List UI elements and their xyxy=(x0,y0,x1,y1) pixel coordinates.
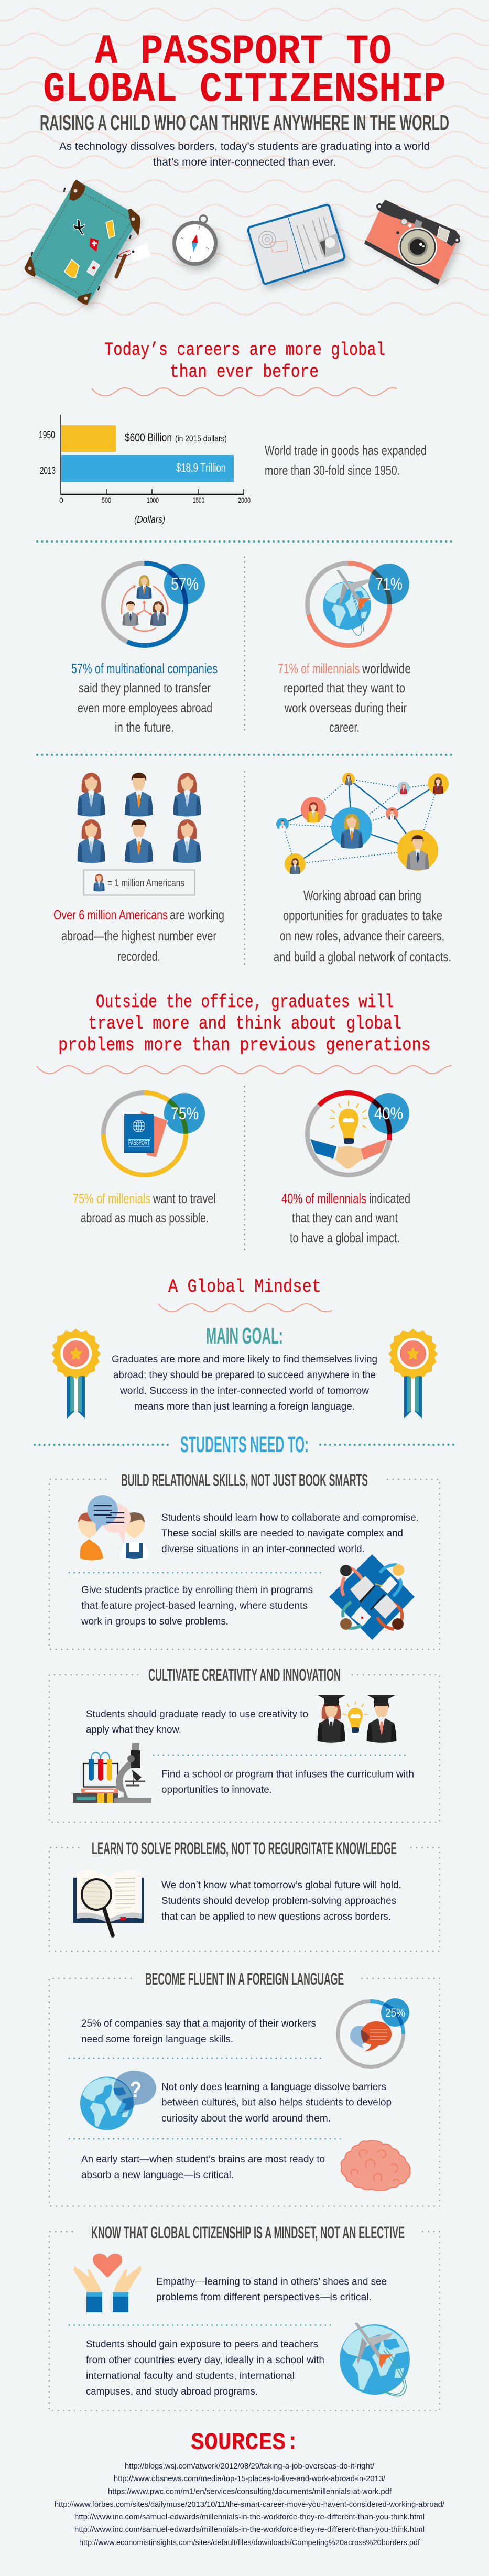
icon: globe with question bubble xyxy=(80,2071,156,2130)
text: 75%: 75% of millenials xyxy=(73,1190,150,1206)
panel: foreign language xyxy=(49,1969,440,2206)
text: source links: http://www.forbes.com/sites/dailymuse/2013/10/11/the-smart-career-move-you-havent-considered-working-abroad/ xyxy=(55,2501,445,2509)
text: 71%: reported that they want to xyxy=(284,680,405,696)
text: creativity xyxy=(86,1708,308,1735)
text: program xyxy=(161,1769,414,1795)
heading: careers: than ever before xyxy=(170,362,319,383)
text: 25% of companies xyxy=(81,2018,316,2045)
icon: passport: PASSPORT xyxy=(128,1139,150,1146)
heading: CULTIVATE CREATIVITY AND INNOVATION xyxy=(148,1665,341,1684)
heading: main goal: MAIN GOAL: xyxy=(206,1323,283,1349)
text: 75% xyxy=(73,1190,216,1226)
intro text: that’s more inter-connected than ever. xyxy=(153,156,336,168)
icon: transferring employees xyxy=(122,575,169,631)
text: problem solving: that can be applied to new questions across borders. xyxy=(161,1911,391,1922)
donut chart: 75% xyxy=(104,1092,205,1175)
text: 57%: even more employees abroad xyxy=(78,700,212,716)
donut chart: 75%: 75% xyxy=(171,1104,199,1123)
heading: outside the office: Outside the office, graduates will xyxy=(96,992,394,1013)
panel: 6 million Americans xyxy=(53,773,224,964)
network diagram xyxy=(276,773,449,874)
panel: 57% multinational companies xyxy=(71,563,218,735)
text: 71%: worldwide xyxy=(362,661,411,676)
text: 57% xyxy=(71,661,218,735)
heading: sources: SOURCES: xyxy=(191,2429,299,2456)
legend xyxy=(84,870,195,895)
text: source links: http://blogs.wsj.com/atwork/2012/08/29/taking-a-job-overseas-do-it-right/ xyxy=(125,2462,375,2471)
text: collaborate xyxy=(161,1512,419,1555)
donut chart: 40%: 40% xyxy=(374,1104,403,1123)
donut chart: 40% xyxy=(290,1076,409,1192)
heading: a global mindset: A Global Mindset xyxy=(168,1276,321,1297)
intro text xyxy=(59,140,430,168)
panel: global network xyxy=(274,773,451,965)
text: exposure: from other countries every day, ideally in a school with xyxy=(86,2354,324,2366)
bar chart: world trade: 500 xyxy=(102,496,111,504)
text: 25% of companies: need some foreign language skills. xyxy=(81,2033,233,2045)
text: problem solving: Students should develop problem-solving approaches xyxy=(161,1895,396,1907)
heading: outside the office xyxy=(58,992,431,1056)
panel: global citizenship mindset xyxy=(49,2223,440,2411)
text: working abroad xyxy=(274,887,451,965)
text: collaborate: Students should learn how to collaborate and compromise. xyxy=(161,1512,419,1523)
pictogram: six people xyxy=(78,773,201,863)
donut chart: 71%: 71% xyxy=(375,575,403,593)
text: 25% of companies: 25% of companies say that a majority of their workers xyxy=(81,2018,316,2029)
text: early start: absorb a new language—is critical. xyxy=(81,2169,234,2181)
icon: luggage handle xyxy=(116,256,125,277)
text: language barriers xyxy=(161,2081,392,2124)
text: source links: http://www.economistinsights.com/sites/default/files/downloads/Competing%20across%20borders.pdf xyxy=(79,2539,420,2547)
text: main goal: world. Success in the inter-connected world of tomorrow xyxy=(119,1385,370,1397)
text: source links: http://www.inc.com/samuel-edwards/millennials-in-the-workforce-they-re-different-than-you-think.html xyxy=(74,2526,425,2534)
text: early start: An early start—when student’s brains are most ready to xyxy=(81,2153,325,2165)
text: creativity: apply what they know. xyxy=(86,1724,181,1735)
text: problem solving xyxy=(161,1879,401,1922)
text: exposure xyxy=(86,2339,324,2397)
icon: luggage tag xyxy=(130,243,151,262)
text: world trade xyxy=(265,442,427,478)
icon: white sticker xyxy=(87,261,100,276)
text: collaborate: These social skills are needed to navigate complex and xyxy=(161,1528,403,1539)
bar chart: world trade: 0 xyxy=(59,496,63,504)
icon: hands with heart xyxy=(73,2254,142,2312)
text: 57%: said they planned to transfer xyxy=(79,680,211,696)
heading: careers xyxy=(104,340,385,383)
text: main goal: means more than just learning a foreign language. xyxy=(134,1401,355,1412)
main goal panel xyxy=(51,1323,438,1419)
bar chart: world trade: 1000 xyxy=(147,496,159,504)
text: source links: http://www.cbsnews.com/media/top-15-places-to-live-and-work-abroad-in-2013/ xyxy=(114,2475,386,2483)
text: source links xyxy=(55,2462,445,2547)
legend: = 1 million Americans xyxy=(107,878,184,889)
text: over 6 million: recorded. xyxy=(117,948,160,964)
text: empathy: problems from different perspectives—is critical. xyxy=(156,2291,372,2303)
bar chart: world trade: $18.9 Trillion xyxy=(176,461,226,474)
text: 40%: that they can and want xyxy=(292,1210,398,1226)
title: GLOBAL CITIZENSHIP xyxy=(43,66,446,114)
text: over 6 million xyxy=(53,907,224,964)
text: 57%: in the future. xyxy=(115,719,174,735)
bar chart: world trade: 1500 xyxy=(193,496,204,504)
panel: build relational skills xyxy=(49,1471,440,1649)
donut chart: 25%: 25% xyxy=(385,2006,405,2019)
icon: left medal xyxy=(51,1329,101,1419)
donut chart: 25% xyxy=(338,1998,409,2066)
text: language barriers: Not only does learning a language dissolve barriers xyxy=(161,2081,386,2093)
icon: camera xyxy=(364,200,460,285)
panel: cultivate creativity xyxy=(49,1665,440,1822)
icon: globe with plane xyxy=(340,2323,410,2396)
icon: open passport xyxy=(248,205,344,284)
text: exposure: international faculty and students, international xyxy=(86,2370,295,2382)
panel: 71% millennials xyxy=(278,563,411,735)
text: problem solving: We don’t know what tomorrow’s global future will hold. xyxy=(161,1879,401,1891)
text: 75%: want to travel xyxy=(153,1190,216,1206)
icon: microscope and test tubes xyxy=(73,1743,151,1803)
text: main goal: Graduates are more and more likely to find themselves living xyxy=(112,1354,377,1365)
text: 71%: 71% of millennials xyxy=(278,661,360,676)
text: collaborate: diverse situations in an inter-connected world. xyxy=(161,1543,365,1555)
text: exposure: campuses, and study abroad programs. xyxy=(86,2386,258,2397)
text: working abroad: Working abroad can bring xyxy=(303,887,421,903)
text: project based: work in groups to solve problems. xyxy=(81,1616,229,1627)
bar chart: world trade: 1950 xyxy=(39,430,55,441)
text: 40% xyxy=(281,1190,410,1246)
icon: right medal xyxy=(388,1329,438,1419)
icon: students around table xyxy=(329,1554,415,1640)
icon: passport xyxy=(124,1111,168,1157)
heading: students need to: STUDENTS NEED TO: xyxy=(180,1432,309,1457)
icon: suitcase xyxy=(25,180,151,305)
heading: outside the office: travel more and think about global xyxy=(88,1013,401,1034)
bar chart: world trade xyxy=(39,415,251,525)
text: early start xyxy=(81,2153,325,2181)
text: 75%: abroad as much as possible. xyxy=(81,1210,209,1226)
panel: 40% global impact xyxy=(281,1076,410,1246)
icon: yellow sticker xyxy=(64,259,79,278)
text: language barriers: between cultures, but also helps students to develop xyxy=(161,2097,392,2108)
heading: careers: Today’s careers are more global xyxy=(104,340,385,361)
heading: outside the office: problems more than previous generations xyxy=(58,1035,431,1056)
bar chart: world trade: $600 Billion xyxy=(125,431,172,444)
text: program: Find a school or program that infuses the curriculum with xyxy=(161,1769,414,1780)
text: project based: that feature project-based learning, where students xyxy=(81,1600,308,1611)
text: 57%: 57% of multinational companies xyxy=(71,661,218,676)
icon: plane sticker xyxy=(73,219,85,235)
text: project based xyxy=(81,1584,313,1627)
icon: lightbulb and handshake xyxy=(310,1101,387,1168)
donut chart: 57% xyxy=(104,563,205,646)
title xyxy=(43,28,446,114)
background wave pattern xyxy=(0,8,489,315)
icon: brain xyxy=(341,2140,410,2191)
panel: learn to solve problems xyxy=(49,1839,440,1951)
bar chart: world trade: (Dollars) xyxy=(134,514,165,525)
icon: graduates with lightbulb xyxy=(318,1695,396,1743)
text: source links: http://www.inc.com/samuel-edwards/millennials-in-the-workforce-they-re-different-than-you-think.html xyxy=(74,2513,425,2521)
text: empathy: Empathy—learning to stand in others’ shoes and see xyxy=(156,2276,387,2288)
text: empathy xyxy=(156,2276,387,2303)
text: program: opportunities to innovate. xyxy=(161,1784,272,1795)
text: exposure: Students should gain exposure to peers and teachers xyxy=(86,2339,318,2350)
text: 40%: indicated xyxy=(369,1190,410,1206)
icon: flag sticker xyxy=(106,220,115,238)
text: source links: https://www.pwc.com/m1/en/services/consulting/documents/millennials-at-work.pdf xyxy=(108,2488,392,2496)
text: language barriers: curiosity about the world around them. xyxy=(161,2113,331,2124)
text: 71%: career. xyxy=(329,719,360,735)
text: main goal xyxy=(112,1354,377,1412)
text: 40%: 40% of millennials xyxy=(281,1190,366,1206)
text: over 6 million: Over 6 million Americans xyxy=(53,907,168,923)
text: over 6 million: abroad—the highest number ever xyxy=(61,928,216,944)
text: world trade: more than 30-fold since 1950. xyxy=(265,462,400,478)
text: world trade: World trade in goods has expanded xyxy=(265,442,427,458)
title: A PASSPORT TO xyxy=(95,28,392,76)
text: 71%: work overseas during their xyxy=(284,700,407,716)
text: creativity: Students should graduate ready to use creativity to xyxy=(86,1708,308,1720)
intro text: As technology dissolves borders, today’s students are graduating into a world xyxy=(59,140,430,153)
text: working abroad: opportunities for graduates to take xyxy=(283,907,442,923)
bar chart: world trade: 2013 xyxy=(40,466,56,477)
icon: book and magnifier xyxy=(73,1870,144,1935)
donut chart: 57%: 57% xyxy=(171,575,199,593)
text: 40%: to have a global impact. xyxy=(290,1230,400,1246)
text: project based: Give students practice by enrolling them in programs xyxy=(81,1584,313,1596)
icon: globe with question bubble: ? xyxy=(130,2077,142,2103)
icon: globe and plane xyxy=(323,570,371,635)
icon: swiss sticker xyxy=(90,238,99,252)
icon: two talking students xyxy=(78,1495,149,1560)
bar chart: world trade: 2000 xyxy=(238,496,251,504)
text: 71% xyxy=(278,661,411,735)
text: main goal: abroad; they should be prepared to succeed anywhere in the xyxy=(113,1369,376,1381)
icon: compass xyxy=(174,215,216,264)
text: over 6 million: are working xyxy=(170,907,224,923)
panel: 75% travel xyxy=(73,1092,216,1226)
bar chart: world trade: (in 2015 dollars) xyxy=(175,434,227,443)
donut chart: 71% xyxy=(307,563,409,646)
